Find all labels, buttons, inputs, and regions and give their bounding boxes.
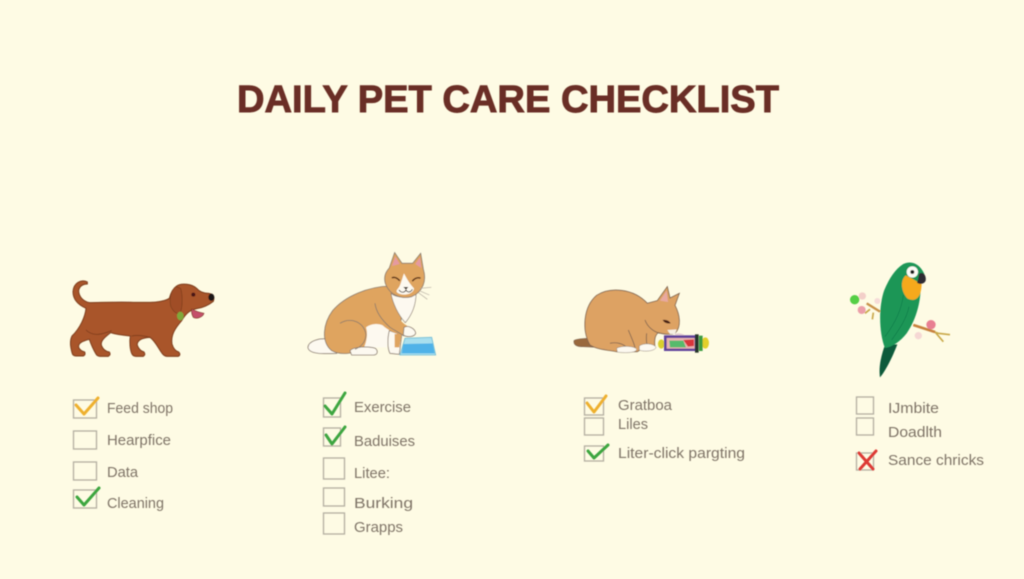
- icon: cat with water bowl: [308, 253, 436, 355]
- item: Hearpfice: Hearpfice: [107, 433, 171, 449]
- item: Liles: [584, 417, 648, 435]
- item: Liter-click pargting: [584, 445, 745, 462]
- panel: dog column: [70, 281, 214, 512]
- item: Burking: Burking: [354, 496, 413, 512]
- panel: kitten column: [574, 287, 745, 462]
- icon: parrot on branch: [850, 262, 950, 377]
- icon: dog: [70, 281, 214, 356]
- item: Liter-click pargting: Liter-click pargting: [618, 446, 745, 462]
- item: Doadlth: Doadlth: [888, 425, 942, 441]
- item: Gratboa: [584, 396, 673, 415]
- item: Burking: [324, 488, 413, 512]
- item: Umbite: IJmbite: [888, 401, 939, 417]
- panel: cat column: [308, 253, 436, 536]
- item: Litee: [324, 458, 390, 482]
- item: Baduises: [324, 427, 415, 450]
- checklist: cat: [324, 393, 415, 536]
- item: Grapps: Grapps: [354, 520, 403, 536]
- title: DAILY PET CARE CHECKLIST: [237, 79, 779, 121]
- item: Sance chricks: Sance chricks: [888, 453, 984, 469]
- checklist: parrot: [856, 397, 984, 470]
- icon: cat with toy: [574, 287, 709, 353]
- item: Liles: Liles: [618, 417, 648, 433]
- item: Feed shop: Feed shop: [107, 401, 173, 417]
- checklist: kitten: [584, 396, 745, 462]
- checklist: dog: [74, 398, 173, 512]
- item: Exercise: Exercise: [354, 400, 411, 416]
- item: Gratboa: Gratboa: [618, 398, 673, 414]
- item: Grapps: [324, 513, 403, 536]
- item: Litee: Litee:: [354, 466, 390, 482]
- item: Exercise: [324, 393, 411, 417]
- item: Data: Data: [107, 465, 139, 481]
- item: Baduises: Baduises: [354, 434, 415, 450]
- panel: parrot column: [850, 262, 984, 470]
- item: Cleaning: Cleaning: [107, 496, 164, 512]
